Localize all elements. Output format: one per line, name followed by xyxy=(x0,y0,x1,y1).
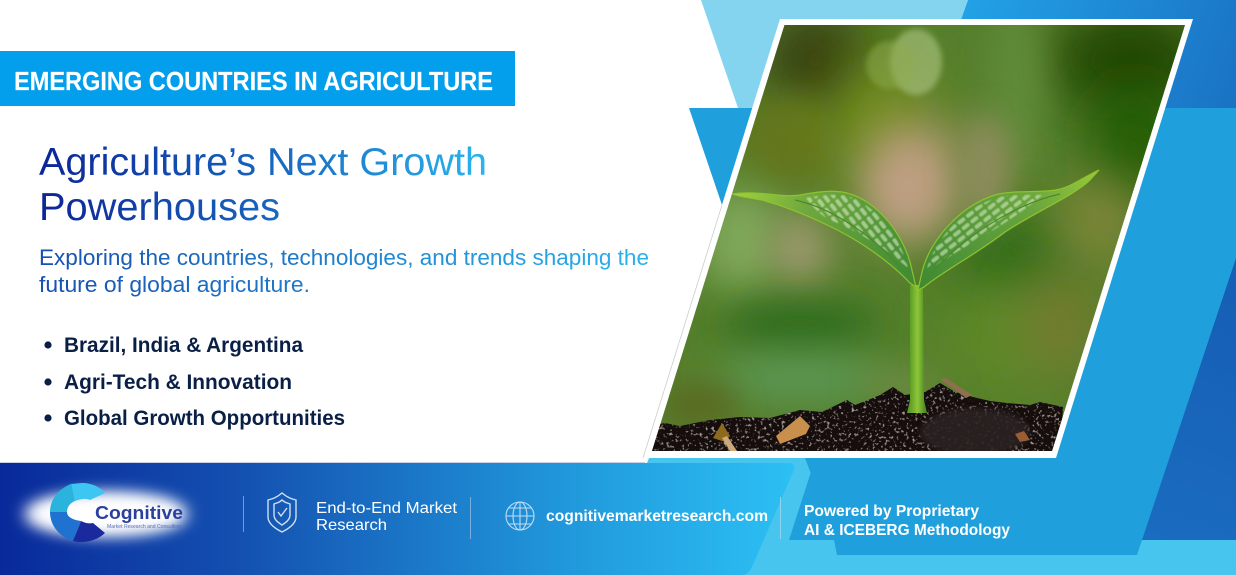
text: end-to-end market research: End-to-End Market xyxy=(316,500,458,517)
bullet list: Brazil, India & Argentina xyxy=(64,333,304,357)
logo: Cognitive: Cognitive xyxy=(95,503,183,523)
divider xyxy=(470,497,471,539)
subtitle xyxy=(39,245,649,297)
subtitle: future of global agriculture. xyxy=(39,272,310,297)
text: end-to-end market research xyxy=(316,500,458,534)
photo: seedling in soil xyxy=(652,25,1185,451)
photo frame xyxy=(643,19,1193,458)
title xyxy=(39,141,487,229)
logo: Cognitive: Market Research and Consulting xyxy=(107,524,181,530)
title: Agriculture’s Next Growth xyxy=(39,141,487,184)
text: methodology: Powered by Proprietary xyxy=(804,503,979,520)
title: Powerhouses xyxy=(39,186,280,229)
text: website: cognitivemarketresearch.com xyxy=(546,508,768,525)
text: methodology xyxy=(804,503,1010,539)
background geometric shapes xyxy=(645,0,1236,575)
bullet list: Global Growth Opportunities xyxy=(64,406,345,430)
left leaf xyxy=(732,191,916,287)
subtitle: Exploring the countries, technologies, and trends shaping the xyxy=(39,245,649,270)
text: end-to-end market research: Research xyxy=(316,517,387,534)
footer bar xyxy=(0,462,794,575)
text: methodology: AI & ICEBERG Methodology xyxy=(804,522,1010,539)
blurred background xyxy=(660,25,1185,426)
logo: Cognitive xyxy=(24,483,188,542)
header banner xyxy=(0,51,515,106)
bullet list xyxy=(44,333,345,430)
icon: globe xyxy=(506,502,534,530)
right leaf xyxy=(918,170,1099,290)
bullet list: Agri-Tech & Innovation xyxy=(64,370,292,394)
soil xyxy=(640,378,1063,456)
sprout stem xyxy=(907,285,927,413)
divider xyxy=(780,497,781,539)
divider xyxy=(243,496,244,532)
icon: shield xyxy=(268,493,296,532)
header banner: EMERGING COUNTRIES IN AGRICULTURE xyxy=(14,66,493,96)
